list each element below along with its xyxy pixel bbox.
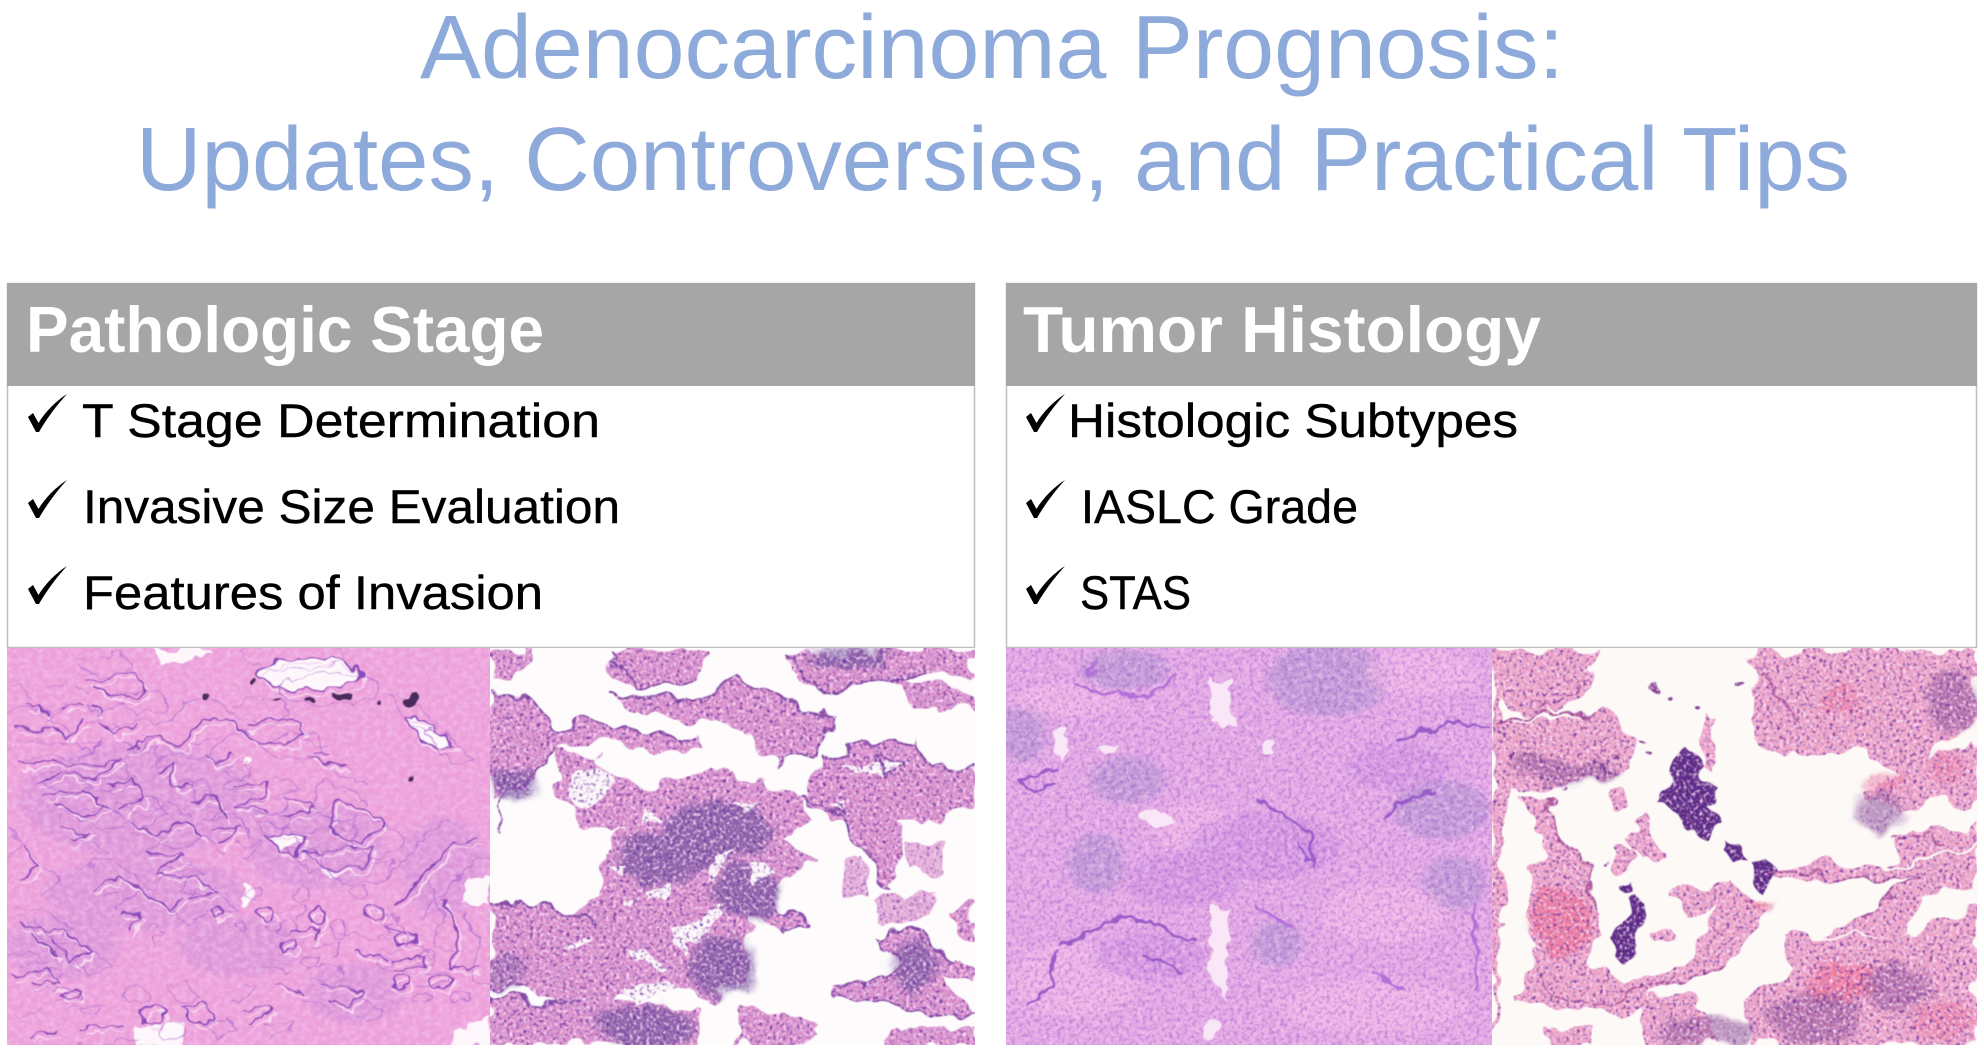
micrograph: spread through air spaces (1492, 648, 1979, 1045)
list item: IASLC grade: IASLC Grade (1081, 480, 1358, 533)
header bar: pathologic stage (7, 283, 975, 386)
icon: check mark (28, 480, 67, 518)
list item: STAS: STAS (1080, 566, 1191, 619)
panel: tumor histology (1006, 283, 1977, 648)
list item: features of invasion: Features of Invasion (83, 566, 543, 619)
panel: pathologic stage (7, 283, 975, 648)
list item: histologic subtypes: Histologic Subtypes (1068, 394, 1518, 447)
title: Adenocarcinoma Prognosis: (420, 0, 1564, 98)
list item: invasive size: Invasive Size Evaluation (83, 480, 620, 533)
heading: pathologic stage: Pathologic Stage (26, 293, 544, 366)
list item: T stage: T Stage Determination (82, 394, 600, 447)
icon: check mark (28, 566, 67, 604)
icon: check mark (28, 394, 67, 432)
heading: tumor histology: Tumor Histology (1023, 293, 1541, 366)
icon: check mark (1026, 480, 1065, 518)
panel box: pathologic stage list (8, 284, 974, 648)
title (136, 0, 1850, 210)
header bar: tumor histology (1006, 283, 1977, 386)
title: Updates, Controversies, and Practical Tips (136, 110, 1850, 210)
micrograph: lepidic pattern (487, 647, 975, 1048)
panel box: tumor histology list (1006, 284, 1976, 648)
icon: check mark (1026, 394, 1065, 432)
micrograph: acinar adenocarcinoma (0, 638, 503, 1052)
icon: check mark (1026, 566, 1065, 604)
micrograph: solid invasive tumor (1001, 643, 1498, 1045)
